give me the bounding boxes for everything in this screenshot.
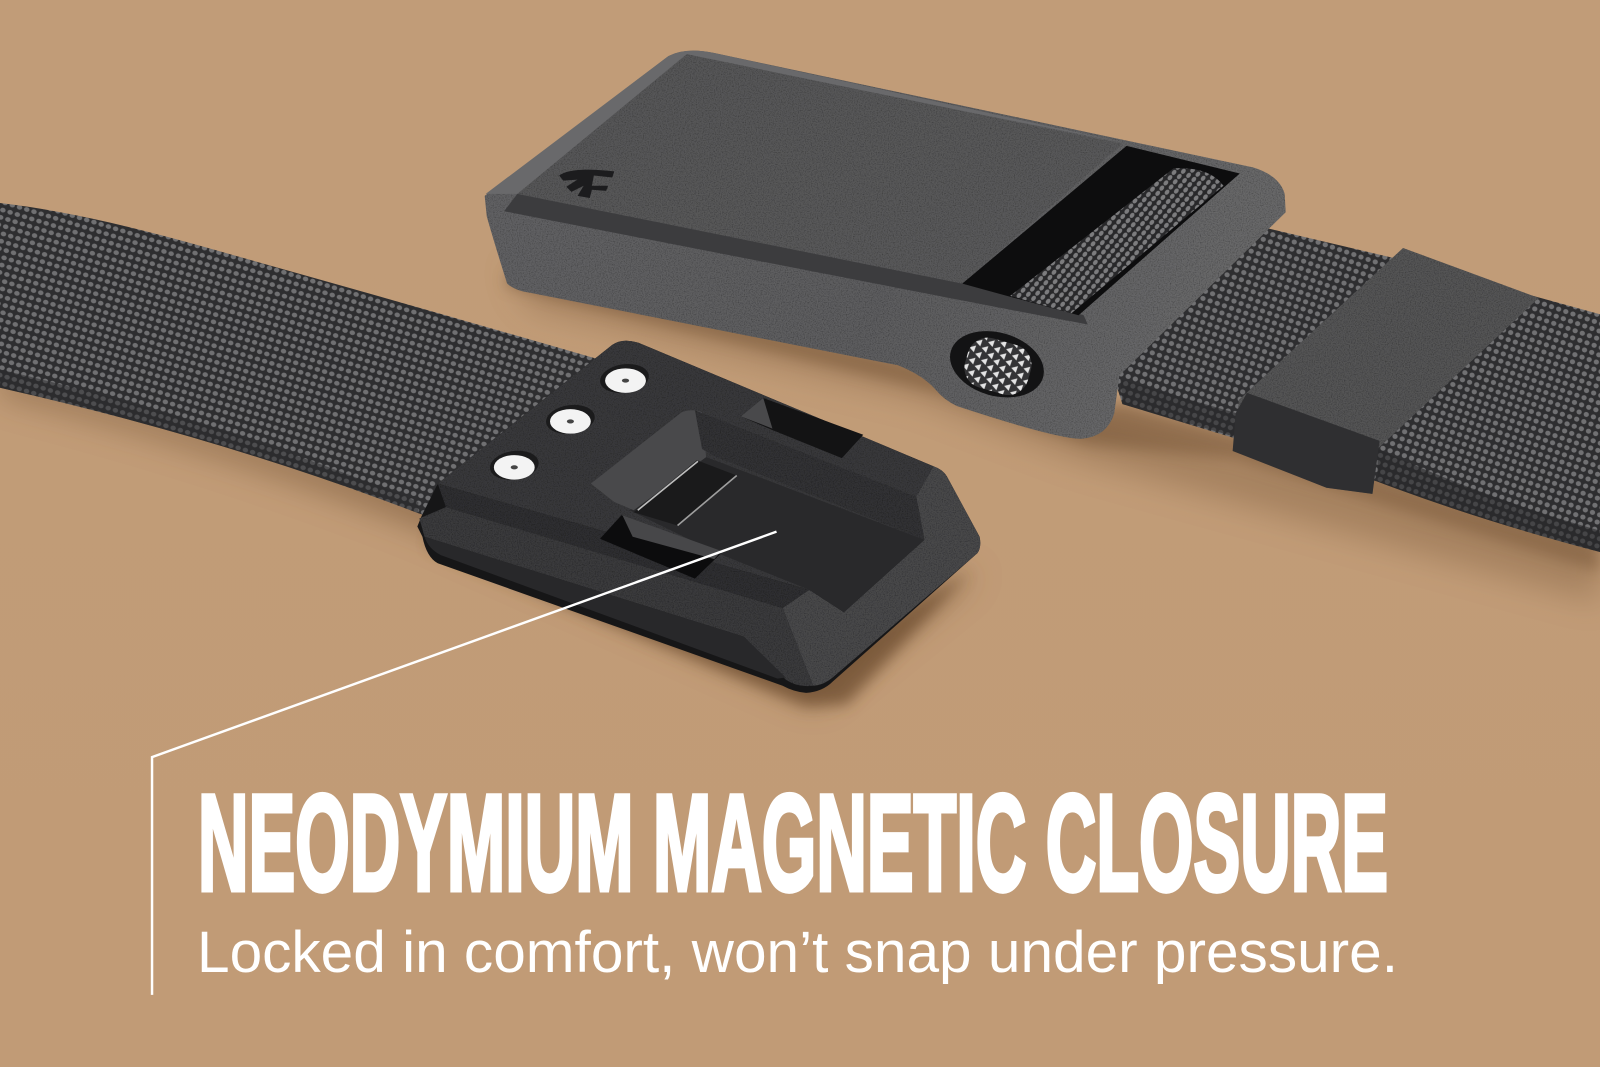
right rim <box>783 466 980 686</box>
webbing in slot <box>1010 168 1223 313</box>
belt keeper loop <box>1233 248 1539 494</box>
dark bevel band <box>504 194 1088 324</box>
buckle silhouette <box>417 341 980 693</box>
subheading: Locked in comfort, won’t snap under pressure. <box>197 920 1398 985</box>
adjustment slot <box>962 146 1240 315</box>
icon: brand logo <box>559 170 614 198</box>
upper buckle body <box>485 51 1286 439</box>
upper slot <box>741 398 863 458</box>
drop shadows beneath belt and buckles <box>0 265 1600 706</box>
right belt strap <box>1112 227 1600 552</box>
upper buckle left rim <box>486 51 1126 194</box>
upper buckle with belt end <box>485 51 1286 439</box>
magnet 3 <box>488 448 541 483</box>
lower buckle with magnets <box>417 341 980 693</box>
button socket <box>942 321 1052 408</box>
recess top ridge <box>695 410 924 540</box>
magnet 2 <box>544 402 597 437</box>
callout leader line <box>152 532 777 995</box>
front upper band <box>438 484 809 608</box>
metal clip with highlights <box>634 460 737 526</box>
front skirt <box>424 537 786 679</box>
top plate <box>438 341 934 590</box>
magnet 1 <box>598 361 651 396</box>
front slot <box>600 515 721 579</box>
front lower bevel <box>419 507 813 686</box>
front slot lip <box>622 515 721 559</box>
upper buckle top face <box>517 54 1122 284</box>
upper slot wall <box>741 398 772 429</box>
knurled release button <box>960 333 1036 400</box>
recess left bevel <box>591 410 706 510</box>
left belt strap <box>0 203 612 531</box>
recess floor <box>630 457 924 612</box>
